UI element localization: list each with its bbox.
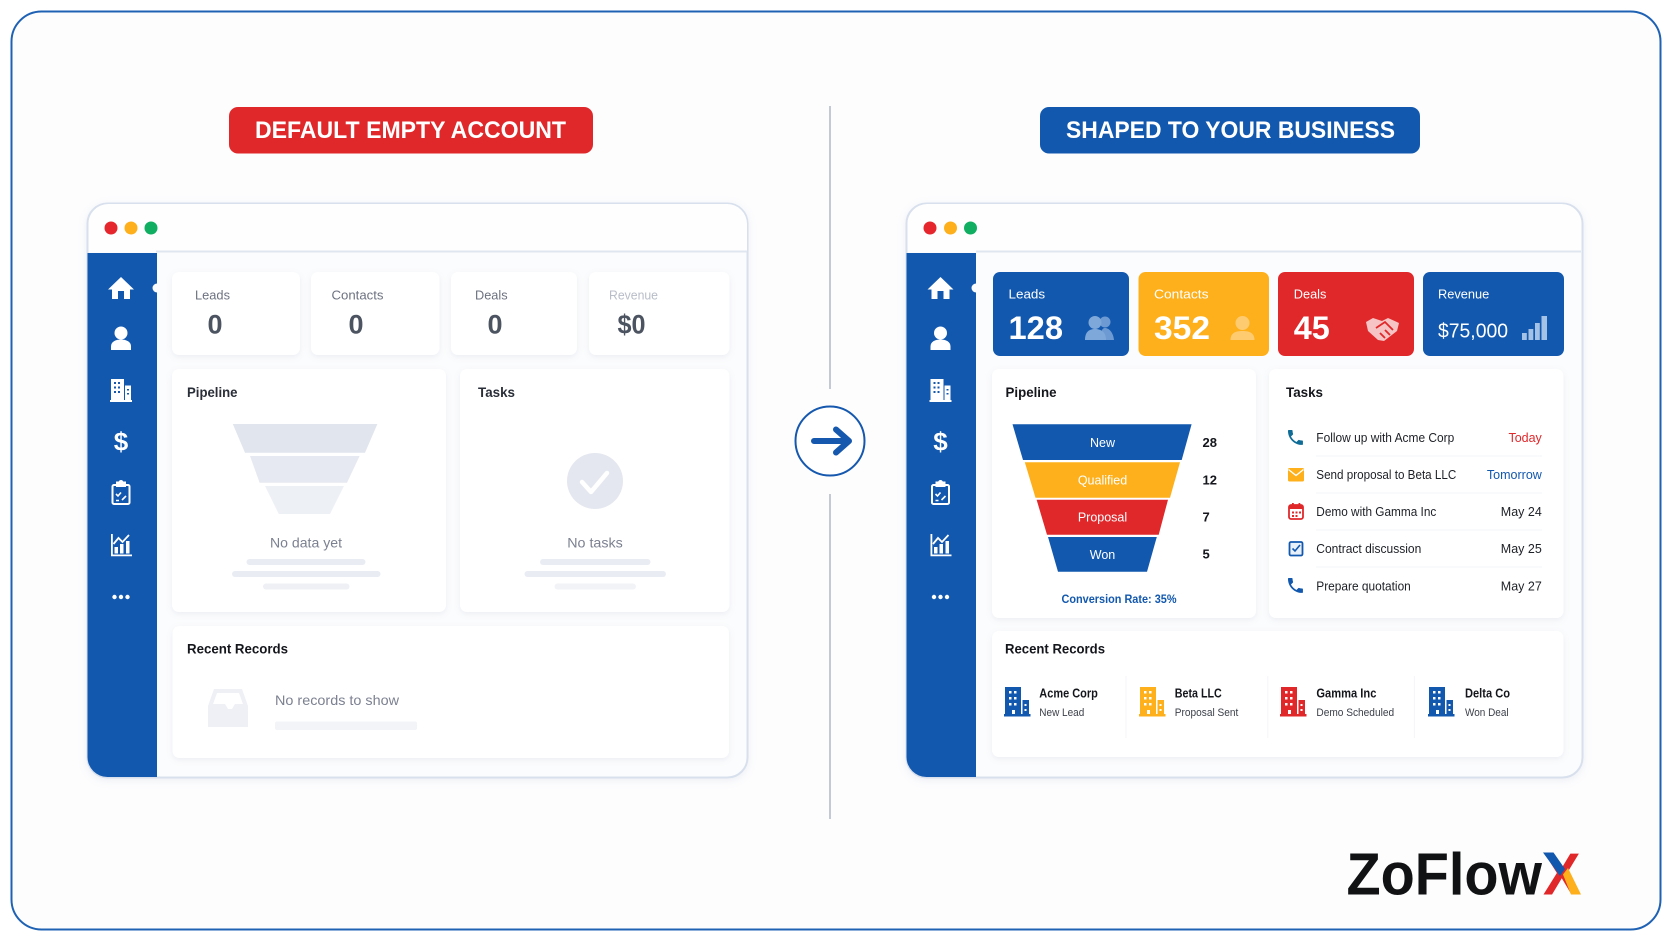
funnel chart — [1012, 424, 1192, 572]
empty text: No records to show — [275, 692, 400, 708]
task: send proposal — [1288, 468, 1543, 482]
task: follow up: Follow up with Acme Corp — [1316, 431, 1454, 445]
card: deals empty: Deals — [475, 288, 508, 302]
card: contacts: 352 — [1154, 310, 1210, 346]
card: revenue: $75,000 — [1438, 320, 1508, 342]
icon: building — [110, 379, 132, 402]
task: send proposal: Send proposal to Beta LLC — [1316, 468, 1456, 482]
icon: clipboard — [932, 481, 949, 504]
placeholder lines — [232, 559, 380, 590]
icon: more dots — [932, 595, 949, 599]
card: deals — [1278, 272, 1414, 356]
placeholder line — [275, 722, 417, 730]
record: gamma: Demo Scheduled — [1316, 707, 1394, 719]
card: contacts empty — [311, 272, 440, 355]
record: delta: Delta Co — [1465, 686, 1510, 700]
card: revenue — [1423, 272, 1564, 356]
card: contacts empty: 0 — [348, 310, 364, 340]
card: leads — [993, 272, 1129, 356]
task: quotation: May 27 — [1501, 580, 1542, 594]
record: acme: Acme Corp — [1039, 686, 1098, 700]
heading: Recent Records — [187, 640, 288, 656]
task: contract: Contract discussion — [1316, 542, 1421, 556]
funnel chart: New — [1090, 436, 1116, 450]
record: gamma: Gamma Inc — [1316, 686, 1376, 700]
sidebar — [88, 253, 162, 777]
icon: people — [1085, 316, 1114, 340]
badge: default empty account: DEFAULT EMPTY ACCOUNT — [255, 117, 566, 144]
icon: person — [111, 326, 131, 350]
panel: pipeline — [992, 369, 1256, 618]
task: demo: Demo with Gamma Inc — [1316, 505, 1436, 519]
card: revenue empty: Revenue — [609, 288, 658, 302]
task: send proposal: Tomorrow — [1487, 468, 1543, 482]
icon: handshake — [1366, 318, 1399, 341]
empty text: No tasks — [567, 534, 623, 550]
record: acme — [1004, 686, 1098, 719]
panel: tasks — [1269, 369, 1564, 618]
record: acme: New Lead — [1039, 707, 1084, 719]
funnel chart: Qualified — [1078, 474, 1127, 488]
panel: recent records — [992, 631, 1564, 757]
empty text: No data yet — [270, 534, 342, 550]
icon: chart — [111, 534, 132, 556]
card: deals empty: 0 — [487, 310, 503, 340]
task: demo — [1289, 503, 1542, 519]
badge: shaped to your business — [1040, 107, 1420, 154]
record: beta: Proposal Sent — [1175, 707, 1238, 719]
card: contacts: Contacts — [1154, 286, 1209, 302]
funnel values: 28 — [1202, 435, 1217, 450]
sidebar — [906, 253, 980, 777]
card: contacts empty: Contacts — [332, 288, 384, 302]
record: gamma — [1280, 686, 1394, 719]
card: deals: 45 — [1294, 310, 1330, 346]
funnel values: 7 — [1202, 510, 1210, 524]
icon: signal bars — [1522, 316, 1547, 340]
panel: recent records empty — [172, 626, 729, 758]
logo: ZoFlowX: X — [1543, 842, 1580, 908]
panel: pipeline empty — [172, 369, 446, 612]
heading: Pipeline — [1006, 384, 1057, 400]
funnel chart: Won — [1090, 548, 1115, 562]
task: contract — [1290, 542, 1542, 556]
card: revenue: Revenue — [1438, 286, 1489, 302]
panel: shaped account window — [906, 204, 1582, 778]
icon: building — [930, 379, 952, 402]
badge: shaped to your business: SHAPED TO YOUR BUSINESS — [1066, 117, 1395, 144]
card: contacts — [1138, 272, 1269, 356]
record: beta: Beta LLC — [1175, 686, 1222, 700]
funnel values — [1202, 435, 1217, 562]
logo: ZoFlowX: ZoFlow — [1346, 842, 1542, 908]
panel: tasks empty — [460, 369, 730, 612]
card: deals empty — [451, 272, 577, 355]
icon: more dots — [112, 595, 130, 599]
icon: home — [928, 277, 954, 299]
panel: empty account window — [88, 204, 748, 778]
icon: dollar: $ — [933, 426, 948, 456]
badge: default empty account — [229, 107, 593, 154]
card: leads: Leads — [1008, 286, 1046, 302]
task: demo: May 24 — [1501, 505, 1542, 519]
heading: Tasks — [1286, 384, 1323, 400]
funnel values: 12 — [1202, 472, 1217, 488]
icon: home — [108, 277, 134, 299]
icon: empty check — [567, 453, 623, 509]
record: delta — [1428, 686, 1510, 719]
heading: Pipeline — [187, 384, 238, 400]
task: contract: May 25 — [1501, 542, 1542, 556]
heading: Recent Records — [1005, 640, 1105, 656]
title bar — [88, 204, 747, 252]
heading: Tasks — [478, 384, 515, 400]
icon: person — [930, 326, 950, 350]
icon: empty inbox — [208, 689, 248, 727]
record: delta: Won Deal — [1465, 707, 1509, 719]
card: leads empty: 0 — [207, 310, 223, 340]
record: beta — [1139, 686, 1238, 719]
empty funnel — [233, 424, 377, 514]
card: revenue empty — [589, 272, 730, 355]
conversion rate: Conversion Rate: 35% — [1062, 592, 1177, 606]
arrow circle — [796, 406, 864, 476]
icon: chart — [930, 534, 952, 556]
funnel values: 5 — [1202, 546, 1210, 562]
center divider — [829, 106, 831, 819]
title bar — [908, 204, 1582, 252]
funnel chart: Proposal — [1078, 510, 1127, 524]
placeholder lines — [524, 559, 666, 590]
card: deals: Deals — [1294, 286, 1327, 302]
task: quotation — [1288, 578, 1542, 594]
icon: contact — [1230, 316, 1254, 340]
card: leads empty — [172, 272, 300, 355]
icon: dollar: $ — [114, 426, 129, 456]
card: leads empty: Leads — [195, 288, 230, 302]
icon: clipboard — [112, 481, 130, 504]
card: leads: 128 — [1008, 310, 1063, 346]
task: follow up: Today — [1508, 431, 1543, 445]
card: revenue empty: $0 — [618, 310, 646, 340]
task: follow up — [1288, 430, 1543, 445]
task: quotation: Prepare quotation — [1316, 580, 1411, 594]
